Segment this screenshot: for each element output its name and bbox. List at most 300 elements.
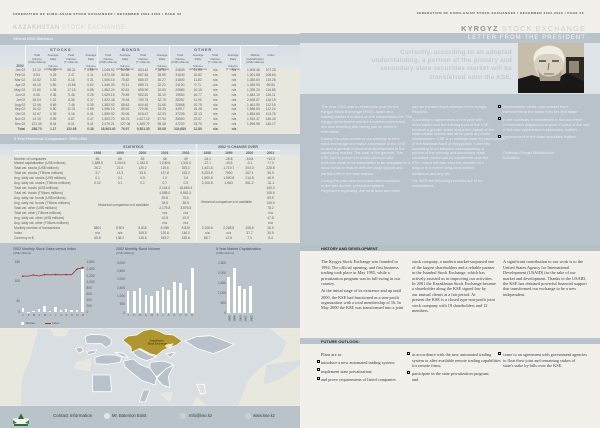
monthly data rows: 24839 — [175, 68, 185, 72]
data rows: 46.9 — [267, 176, 274, 180]
monthly data rows: 31.65 — [158, 102, 166, 106]
letter column 2: infrastructure. KSE is in strategic state by participation — [412, 136, 505, 141]
data rows: 65.8 — [94, 236, 101, 240]
monthly data rows: 6.36 — [68, 98, 75, 102]
chart: monthly bond volume — [116, 247, 194, 317]
month labels: M — [151, 313, 153, 317]
panel: future outlook band — [300, 338, 600, 344]
monthly data rows: 28.53 — [158, 68, 166, 72]
chart subtitle: (US$ millions) — [216, 251, 234, 255]
monthly data rows: 90.06 — [121, 112, 129, 116]
column 1 — [317, 352, 396, 382]
monthly data rows: 1,301.88 — [247, 73, 260, 77]
column headers: Total — [140, 53, 146, 57]
column 2: stock company with 18 shareholders and 12 — [412, 303, 487, 308]
monthly data rows: 604.42 — [138, 68, 148, 72]
column headers: Daily — [230, 56, 236, 60]
panel: charts background — [0, 243, 300, 328]
chart: monthly stock sales vs index — [13, 247, 94, 325]
letter column 3: bullets: Substantially create open market fixed — [502, 104, 568, 109]
column headers: 2002 — [16, 64, 24, 68]
monthly data rows: 5.41 — [87, 122, 94, 126]
month labels: O — [179, 313, 181, 317]
monthly data rows: 8.94 — [33, 73, 40, 77]
monthly data rows: 816.47 — [138, 112, 148, 116]
monthly data rows: n/a — [213, 83, 218, 87]
monthly data rows: 16.77 — [194, 93, 202, 97]
column headers: Volume — [86, 64, 96, 68]
monthly data rows: Apr 02 — [15, 83, 25, 87]
monthly data rows: 26.10 — [158, 93, 166, 97]
monthly data rows: 80.56 — [121, 73, 129, 77]
signature: Chairman Sergei Mikhailovich — [502, 150, 554, 155]
axis labels: 1,500 — [218, 281, 226, 285]
data rows: Avg. daily val. stocks (US$ millions) — [14, 176, 66, 180]
text block: future outlook — [317, 352, 587, 382]
letter column 1: Kyrgyz Stock Exchange (KSE). Apart as a — [321, 109, 393, 114]
data rows: 2,106.8 — [202, 181, 213, 185]
kazakhstan highlighted: Kazakhstan — [150, 339, 164, 343]
column 1: privatization program was in full swing in our — [321, 276, 400, 281]
left axis labels — [14, 260, 20, 314]
data rows: Total val. stocks (T'illions millions) — [14, 171, 63, 175]
data rows: 39.8 — [162, 196, 168, 200]
monthly data rows: 0.85 — [87, 88, 94, 92]
monthly data rows: 1,546.30 — [102, 83, 115, 87]
data rows: 66 — [118, 156, 122, 160]
letter column 2: For 2003 the following priorities are to be — [412, 178, 483, 183]
monthly data rows: n/a — [232, 73, 236, 77]
monthly data rows: 37295 — [175, 112, 185, 116]
column 3: A significant contribution to our work is to the — [503, 259, 583, 264]
monthly data rows: 1,484.10 — [247, 93, 260, 97]
data rows: 14.3 — [117, 171, 123, 175]
monthly data rows: 146.17 — [266, 122, 276, 126]
data rows: 5,203.8 — [202, 171, 213, 175]
monthly data rows: 22.07 — [194, 117, 202, 121]
column headers: Daily — [195, 56, 201, 60]
column headers: Volume — [138, 56, 148, 60]
axis labels: 2,500 — [218, 261, 226, 265]
data rows: -40.8 — [225, 161, 232, 165]
month labels: N — [76, 312, 78, 316]
letter column 2: According to agreements in the year with — [412, 116, 483, 122]
legend — [21, 320, 60, 325]
legend: Shares — [26, 320, 35, 324]
panel: 5 year comparison table — [0, 144, 300, 243]
column 1: introduce a new automated trading system; — [321, 360, 395, 365]
letter column 3: bullets: of the new system and a secondary market — [502, 126, 577, 132]
column headers: Average — [120, 53, 130, 57]
column headers: Volume — [120, 64, 130, 68]
axis labels: 2,000 — [117, 277, 125, 281]
column 2: a shareholder along the KSE signed law by — [412, 286, 486, 291]
monthly data rows: 11.54 — [194, 68, 202, 72]
photo: president portrait — [518, 43, 584, 93]
column headers: Volume — [157, 64, 167, 68]
column 1: trading took place in May 1995, while a — [321, 270, 390, 275]
monthly data rows: 115.26 — [266, 78, 276, 82]
data rows: 2,288.8 — [223, 226, 234, 230]
column 3 — [498, 352, 588, 368]
column headers: Volume — [175, 56, 185, 60]
exchange name left: KAZAKHSTAN STOCK EXCHANGE — [13, 24, 126, 30]
data rows: 0.1 — [118, 181, 122, 185]
monthly data rows: n/a — [213, 88, 218, 92]
monthly data rows: 0.52 — [50, 78, 56, 82]
column 2: our mutual clients at a fair period. At — [412, 292, 475, 297]
data rows: 153.2 — [161, 236, 169, 240]
month labels: A — [38, 312, 40, 316]
pull quote: Currently, according to an adopted — [400, 49, 512, 56]
month labels — [22, 312, 84, 316]
data rows: 7.3 — [247, 236, 252, 240]
data rows: 0.1 — [95, 176, 100, 180]
monthly data rows: 5.46 — [68, 93, 75, 97]
monthly data rows: 695.90 — [138, 88, 148, 92]
month labels: J — [55, 312, 56, 316]
monthly data rows: 116.11 — [266, 93, 275, 97]
note: not available right: Historical comparison not available — [201, 200, 252, 204]
column headers: (US$ millions) — [246, 60, 264, 64]
data rows: 119.6 — [161, 166, 169, 170]
column headers: Total — [177, 53, 183, 57]
data rows: +10.3 — [266, 156, 275, 160]
monthly data rows: 16.48 — [194, 107, 202, 111]
data rows: 108.6 — [138, 231, 147, 235]
column headers: Daily — [50, 56, 56, 60]
panel: quote area — [300, 43, 600, 94]
monthly data rows: May 02 — [14, 88, 25, 92]
monthly data rows: 1.08 — [50, 88, 56, 92]
data rows: 2,108.8 — [202, 226, 213, 230]
monthly data rows: 22.12 — [33, 68, 41, 72]
data rows: +7.3 — [267, 161, 274, 165]
axis labels: 0 — [224, 311, 226, 315]
data rows: 2,264.6 — [114, 161, 126, 165]
chart subtitle: (US$ millions) — [13, 251, 31, 255]
monthly data rows: 2,479.21 — [102, 122, 115, 126]
left axis labels: 150 — [15, 260, 20, 264]
column 2: in the Istanbul Stock Exchange, which has — [412, 270, 485, 275]
monthly data rows: 1,395.20 — [247, 88, 260, 92]
data rows: 108.9 — [266, 191, 275, 195]
monthly data rows: n/a — [213, 68, 218, 72]
year row: 1998 — [94, 150, 101, 154]
running header right: FEDERATION OF EURO-ASIAN STOCK EXCHANGES / DECEMBER 2002-2003 / PAGE 00 — [417, 10, 584, 14]
monthly data rows: 32.75 — [158, 98, 166, 102]
monthly data rows: 1,919.47 — [247, 117, 260, 121]
bullet — [498, 134, 501, 138]
data rows: 108.8 — [245, 226, 254, 230]
note: not available left: Historical comparison not available — [98, 202, 149, 206]
data rows: Monthly number of transactions — [14, 226, 60, 230]
data rows: -27.1 — [203, 161, 211, 165]
data rows: n/a — [183, 211, 188, 215]
data rows: 2,175.8 — [159, 206, 170, 210]
data rows: 129.2 — [138, 166, 147, 170]
column headers: Volume — [210, 56, 220, 60]
data rows: 0.5 — [140, 176, 145, 180]
monthly data rows: 0.39 — [50, 112, 56, 116]
axis labels: 1,500 — [117, 286, 125, 290]
monthly data rows: 7.46 — [68, 102, 75, 106]
right axis labels: 1,200 — [86, 274, 94, 278]
monthly data rows: 1,506.16 — [102, 78, 115, 82]
monthly data rows: 22668 — [175, 102, 185, 106]
axis labels: 2,000 — [218, 271, 226, 275]
monthly data rows: 324,689 — [174, 127, 186, 131]
monthly data rows: 75.82 — [121, 78, 129, 82]
pull quote — [371, 49, 512, 81]
section heading: FUTURE OUTLOOK: — [321, 339, 360, 344]
letter column 3: bullets: Commission dispatches to price in price of the rate — [502, 122, 590, 126]
year labels — [228, 315, 253, 322]
chart subtitle: (US$ millions) — [116, 251, 134, 255]
legend: Index — [52, 320, 59, 324]
column headers: Volume — [48, 64, 58, 68]
data rows: 214.8 — [245, 176, 254, 180]
data rows: 228.8 — [266, 166, 275, 170]
year row: 1999 — [225, 150, 232, 154]
contact: address: Mr. Batemon Bolot — [112, 413, 146, 418]
monthly data rows: n/a — [213, 117, 218, 121]
data rows: 8 820 — [182, 226, 190, 230]
horizontal rule — [14, 154, 280, 157]
data rows: 18.8 — [162, 201, 168, 205]
monthly data rows: 21100 — [176, 83, 184, 87]
monthly data rows: 12.06 — [33, 102, 41, 106]
monthly data rows: 26500 — [175, 117, 185, 121]
data rows: 3.7 — [95, 171, 100, 175]
bullet — [498, 105, 501, 108]
monthly data rows: 30.27 — [158, 78, 166, 82]
monthly data rows: 67.94 — [158, 117, 166, 121]
month labels: M — [139, 313, 141, 317]
letter column 1: participants in the new market. — [321, 171, 374, 176]
monthly data rows: 9,581.35 — [137, 127, 150, 131]
monthly data rows: 750.75 — [138, 98, 148, 102]
monthly data rows: 0.41 — [87, 112, 94, 116]
data rows: Number of companies — [14, 156, 46, 160]
letter column 3: bullets: instruments to the funds from the first stage. — [502, 109, 578, 114]
bullet — [498, 117, 501, 120]
column 2: system or alter available remote trading capabilities — [412, 358, 501, 362]
monthly data rows: 1,049.92 — [102, 68, 115, 72]
letter column 1: KSE had to present in a well-selected and — [321, 155, 393, 160]
monthly data rows: 59.48 — [158, 122, 166, 126]
monthly data rows: 152.98 — [66, 127, 76, 131]
monthly data rows: n/a — [232, 88, 236, 92]
section headings — [50, 46, 212, 52]
year labels: 1999 — [234, 315, 237, 321]
monthly data rows — [14, 68, 276, 131]
monthly data rows: 1,854.60 — [247, 112, 260, 116]
monthly data rows: 1.17 — [50, 127, 56, 131]
monthly data rows: 6.16 — [68, 78, 75, 82]
letter column 1: Kyrgyz government and the business community — [321, 119, 405, 124]
monthly data rows: 17.18 — [67, 88, 76, 92]
data rows: n/a — [183, 221, 188, 225]
column headers: Average — [48, 53, 58, 57]
monthly data rows: n/a — [213, 78, 218, 82]
monthly data rows: n/a — [232, 68, 236, 72]
column 2 — [412, 259, 496, 313]
axis labels: 2,500 — [117, 269, 125, 273]
year labels: 2001 — [244, 315, 247, 321]
column 1: At the initial stage of its existence and up until — [321, 288, 401, 293]
column headers: Volume — [103, 56, 113, 60]
data rows: Total val. bonds (US$ millions) — [14, 186, 58, 190]
axis labels — [218, 261, 226, 315]
data rows: Total val. other (T'illions millions) — [14, 211, 61, 215]
letter column 1: During the year new resources were available — [321, 178, 400, 183]
data rows: Index — [14, 231, 22, 235]
letter column 3: bullets — [498, 104, 590, 160]
monthly data rows: 1,956.10 — [102, 107, 115, 111]
monthly data rows: 10.79 — [194, 102, 202, 106]
column headers: Total — [68, 53, 74, 57]
data rows: -25.8 — [225, 156, 232, 160]
data rows: 49 — [184, 156, 188, 160]
index line — [22, 266, 84, 277]
column 3: state's stake by bills over the KSE. — [503, 363, 562, 368]
month labels: D — [191, 313, 193, 317]
monthly data rows: n/a — [213, 93, 218, 97]
column 1: implement state privatization; — [321, 368, 372, 374]
column 1: 2000, the KSE had functioned as a non-profit — [321, 295, 399, 300]
data rows: 1,341.0 — [180, 161, 191, 165]
data rows: Avg. daily val. other (US$ millions) — [14, 216, 64, 220]
column 2: in accordance with the new automated trading — [412, 352, 491, 357]
monthly data rows: 720.80 — [138, 107, 148, 111]
month labels: J — [49, 312, 51, 316]
data rows: Avg. daily val. bonds (US$ millions) — [14, 196, 66, 200]
data rows: 86.7 — [204, 236, 210, 240]
data rows: 0.5 — [183, 181, 188, 185]
monthly data rows: n/a — [232, 107, 236, 111]
data rows: 105.0 — [266, 186, 275, 190]
year labels: 2000 — [239, 315, 242, 321]
data rows: 146.2 — [182, 231, 190, 235]
bullet — [316, 368, 320, 371]
bullet — [407, 371, 410, 374]
monthly data rows: 1,405.48 — [247, 68, 260, 72]
column 1 — [321, 259, 404, 310]
column headers: (T millions) — [155, 67, 169, 71]
axis labels: 0 — [123, 310, 125, 314]
letter column 1: their ideas. — [321, 129, 340, 134]
letter column 2: emphasized: — [412, 183, 434, 188]
monthly data rows: 1,583.92 — [102, 102, 115, 106]
letter column 1: stock funds to ensure with the large growth and — [321, 165, 403, 170]
kazakhstan highlighted — [123, 329, 182, 355]
column 2: and — [412, 376, 418, 382]
year labels: 1998 — [228, 315, 231, 321]
year labels: 2002 — [250, 315, 253, 321]
month labels: F — [134, 313, 135, 317]
column 1: May 2000 the KSE was transformed into a joint — [321, 305, 403, 310]
data rows: n/a — [268, 211, 273, 215]
data rows: Avg. daily val. stocks (T'illions millions) — [14, 181, 70, 185]
monthly data rows: Sep 02 — [15, 107, 25, 111]
bond bars — [127, 268, 194, 313]
share bars — [22, 269, 84, 313]
monthly data rows: n/a — [213, 107, 218, 111]
monthly data rows: n/a — [232, 78, 236, 82]
panel: footer contact bar — [0, 406, 300, 428]
pull quote: secondary state securities market will be — [380, 65, 512, 72]
pull quote: understanding, a portion of the primary and — [371, 57, 512, 64]
heading change: 2002 % CHANGE OVER — [218, 144, 258, 148]
data rows: 3,876.5 — [180, 206, 191, 210]
data rows: 12.6 — [226, 236, 232, 240]
letter column 1: trading market it is listed on the independent list. The — [321, 114, 412, 119]
data rows: 1,401.8 — [202, 166, 213, 170]
chart title: 2002 Monthly Bond Volume — [116, 247, 160, 251]
monthly data rows: 47200 — [175, 122, 185, 126]
data rows: 0.7 — [162, 181, 167, 185]
column 2: members. — [412, 308, 429, 313]
right axis labels: 0 — [86, 310, 88, 314]
monthly data rows: Jul 02 — [16, 98, 25, 102]
month labels: M — [44, 312, 46, 316]
column 2: present the KSE is a closed type non-profit joint — [412, 297, 495, 302]
data rows: 5.4 — [268, 236, 273, 240]
chart title: 5 Year Market Capitalization — [216, 247, 261, 251]
panel: right page header — [416, 10, 586, 32]
monthly data rows: 28.85 — [158, 73, 166, 77]
letter column 2: KSE, which will also hold the benefits of a — [412, 160, 484, 165]
monthly data rows: Total — [18, 127, 25, 131]
data rows: 1.6 — [183, 176, 188, 180]
year row: 1999 — [116, 150, 124, 154]
monthly data rows: n/a — [232, 93, 236, 97]
monthly data rows: 33.33 — [158, 107, 166, 111]
contact heading: Contact Information — [53, 413, 92, 418]
monthly data rows: 1,627.12 — [137, 117, 150, 121]
month labels: J — [162, 313, 163, 317]
horizontal rule — [14, 148, 280, 151]
monthly data rows: 9.16 — [68, 112, 75, 116]
data rows: 26.2 — [94, 166, 101, 170]
column 2: of the largest shareholders and a reliable partner — [412, 265, 495, 270]
kyrgyzstan marker — [166, 344, 173, 347]
data rows: 0.02 — [94, 181, 101, 185]
monthly data rows: 0.38 — [87, 127, 94, 131]
data rows: n/a — [226, 231, 231, 235]
data rows: 33.5 — [139, 171, 146, 175]
month labels: S — [65, 312, 67, 316]
column headers: Total — [34, 53, 40, 57]
letter column 1: potential value to be assembled in an adequate in a — [321, 160, 410, 165]
data rows: 2,154.0 — [159, 186, 170, 190]
right axis labels: 600 — [86, 292, 92, 296]
column 2: actively assisted us in improving our activities. — [412, 276, 493, 281]
monthly data rows: 6.87 — [68, 117, 75, 121]
right axis labels: 1,000 — [86, 280, 94, 284]
right axis labels: 1,600 — [86, 260, 94, 264]
column 1: country. — [321, 281, 335, 286]
column headers: Daily — [88, 56, 94, 60]
monthly data rows: n/a — [232, 127, 236, 131]
data rows: 8 501 — [116, 226, 124, 230]
data rows: 8 818 — [138, 226, 147, 230]
year row: 2000 — [139, 150, 146, 154]
year row: 2002 — [182, 150, 189, 154]
column headers: Average — [193, 53, 203, 57]
column 3: the KSE has obtained powerful financial support — [503, 281, 587, 286]
